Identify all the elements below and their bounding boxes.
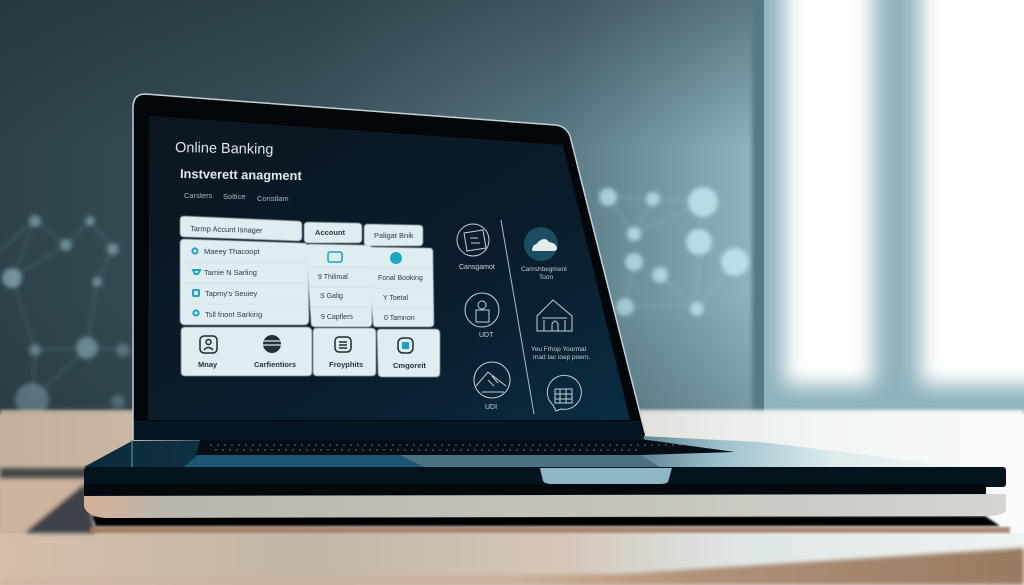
icon: card <box>328 252 342 262</box>
middle card labels: 9 Capflers <box>321 314 353 321</box>
icon: handshake circle <box>474 362 510 398</box>
network nodes left <box>0 215 130 417</box>
laptop lid <box>133 94 645 440</box>
list labels: Tapmy's Seuiey <box>205 289 258 298</box>
icon: bank building <box>537 300 572 331</box>
icon: striped globe <box>263 335 281 353</box>
bottom card: money and conference: Carfientiors <box>254 360 296 369</box>
right card <box>367 247 434 327</box>
icon: user badge <box>200 336 217 353</box>
bottom card: money and conference <box>181 327 312 376</box>
list labels: Tsll fnont Sarking <box>205 310 262 319</box>
laptop deck with keyboard <box>84 436 965 467</box>
list labels: Maeey Thacoopt <box>204 247 261 256</box>
icon: teal circle <box>390 252 402 264</box>
header card labels: Tarmp Accunt Isnager <box>190 224 263 235</box>
right card labels: 0 Tamnon <box>384 315 415 322</box>
tab labels: Soltice <box>223 192 246 201</box>
background wall <box>0 0 1024 420</box>
header cards <box>180 216 423 246</box>
small right text: Yeu Frhop Yoormal <box>531 346 587 353</box>
table top <box>0 410 1024 585</box>
icon: document <box>335 337 351 352</box>
right card labels <box>378 275 423 322</box>
icon column right label <box>521 266 567 281</box>
icon column right label: Toon <box>539 274 553 281</box>
icon: tablet circle <box>457 224 489 256</box>
header card labels: Paligat Bnik <box>374 231 414 240</box>
middle card <box>306 244 372 327</box>
list labels: Tamie N Sarling <box>204 268 257 277</box>
bottom card: cmgoreit: Cmgoreit <box>393 361 426 370</box>
icon column left labels: Cansgamot <box>459 264 495 271</box>
bottom card: froyphits: Froyphits <box>329 360 363 369</box>
small right text: mad tac ioep poern. <box>533 354 591 361</box>
list icons <box>192 248 200 316</box>
middle card labels <box>318 274 353 321</box>
tab labels: Constlam <box>257 194 289 203</box>
middle card labels: S Galig <box>320 293 343 300</box>
icon column left labels: UDI <box>485 404 497 411</box>
bottom card labels: Mnay <box>198 360 218 369</box>
screen title: Online Banking <box>175 140 274 158</box>
right card labels: Fonal Booking <box>378 275 423 282</box>
tab labels <box>184 191 289 203</box>
header card labels <box>190 224 414 240</box>
icon column left labels: UDT <box>479 332 494 339</box>
icon column left labels <box>459 264 497 411</box>
bottom card: cmgoreit <box>377 329 440 377</box>
laptop <box>84 94 1006 518</box>
icon column right label: Camshbegment <box>521 266 567 273</box>
icon: calendar speech bubble <box>547 375 581 411</box>
icon: shield badge <box>398 338 413 353</box>
tab labels: Carsters <box>184 191 213 200</box>
list labels <box>204 247 262 319</box>
main card: accounts list <box>180 239 309 325</box>
under-laptop shadow <box>90 527 1010 533</box>
screen subtitle: Instverett anagment <box>180 166 303 183</box>
laptop base edge <box>84 467 1006 518</box>
small right text <box>531 346 591 361</box>
icon: cloud <box>524 227 558 261</box>
header card labels: Account <box>315 228 346 237</box>
right card labels: Y Toetal <box>383 295 408 302</box>
bright window with curtains <box>752 0 1024 420</box>
icon column left <box>457 224 510 398</box>
bottom card: froyphits <box>313 328 376 376</box>
icon: person circle <box>465 293 499 327</box>
left shadow <box>0 468 95 533</box>
network nodes right <box>599 187 749 316</box>
divider line <box>501 220 534 414</box>
middle card labels: 9 Thilimal <box>318 274 348 281</box>
